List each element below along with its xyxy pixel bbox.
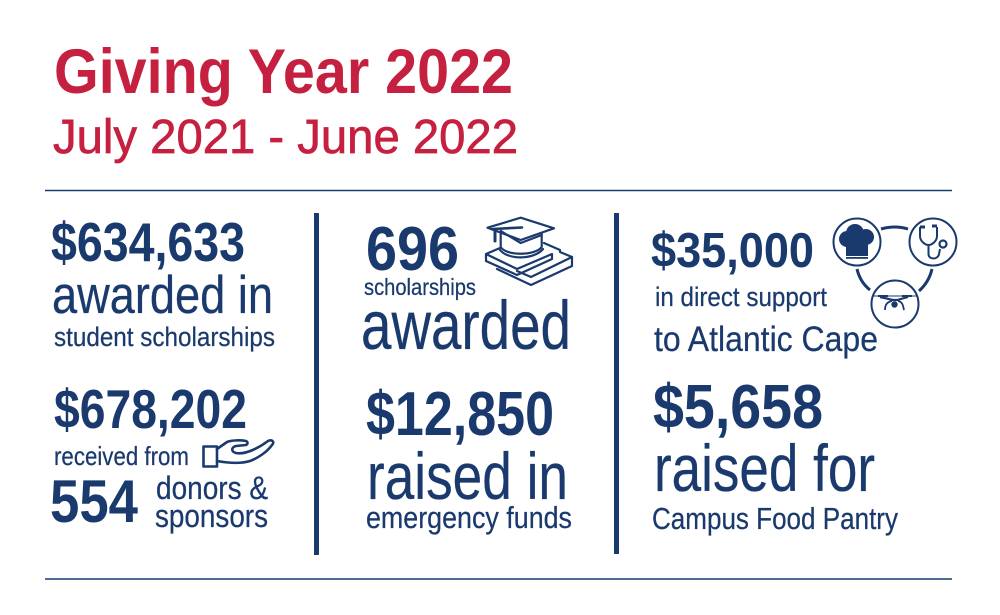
panel: left column [50, 211, 275, 535]
text: in direct support: in direct support [655, 282, 827, 312]
text: awarded in: awarded in [52, 266, 273, 325]
text: emergency funds: emergency funds [366, 500, 572, 535]
text: to Atlantic Cape: to Atlantic Cape [654, 320, 878, 359]
text: Campus Food Pantry: Campus Food Pantry [652, 501, 898, 536]
icon: graduation cap on books [486, 218, 572, 285]
stat: scholarships total: $634,633 [51, 211, 245, 273]
stat: amount received: $678,202 [54, 378, 247, 440]
panel: middle column [361, 215, 572, 535]
text: received from: received from [54, 441, 189, 471]
subtitle: date range: July 2021 - June 2022 [53, 111, 518, 164]
title: Giving Year 2022 [54, 37, 513, 107]
icon: chef hat [834, 218, 880, 266]
text: donors and: donors & [156, 470, 268, 506]
stat: emergency funds raised: $12,850 [366, 380, 554, 449]
panel: right column [651, 218, 956, 536]
stat: scholarship count: 696 [366, 215, 459, 284]
stat: donor count: 554 [50, 468, 139, 535]
text: sponsors: sponsors [155, 498, 268, 534]
stat: direct support: $35,000 [651, 224, 814, 278]
text: scholarships: scholarships [364, 274, 476, 300]
stat: food pantry raised: $5,658 [653, 373, 823, 442]
icon group: chef hat, stethoscope, drone [834, 218, 956, 328]
icon: open hand [204, 440, 273, 466]
icon: drone [872, 280, 918, 328]
text: awarded: awarded [361, 287, 571, 364]
text: raised in: raised in [367, 439, 568, 513]
icon: stethoscope [910, 218, 956, 266]
text: student scholarships: student scholarships [54, 322, 275, 352]
text: raised for: raised for [654, 431, 875, 505]
